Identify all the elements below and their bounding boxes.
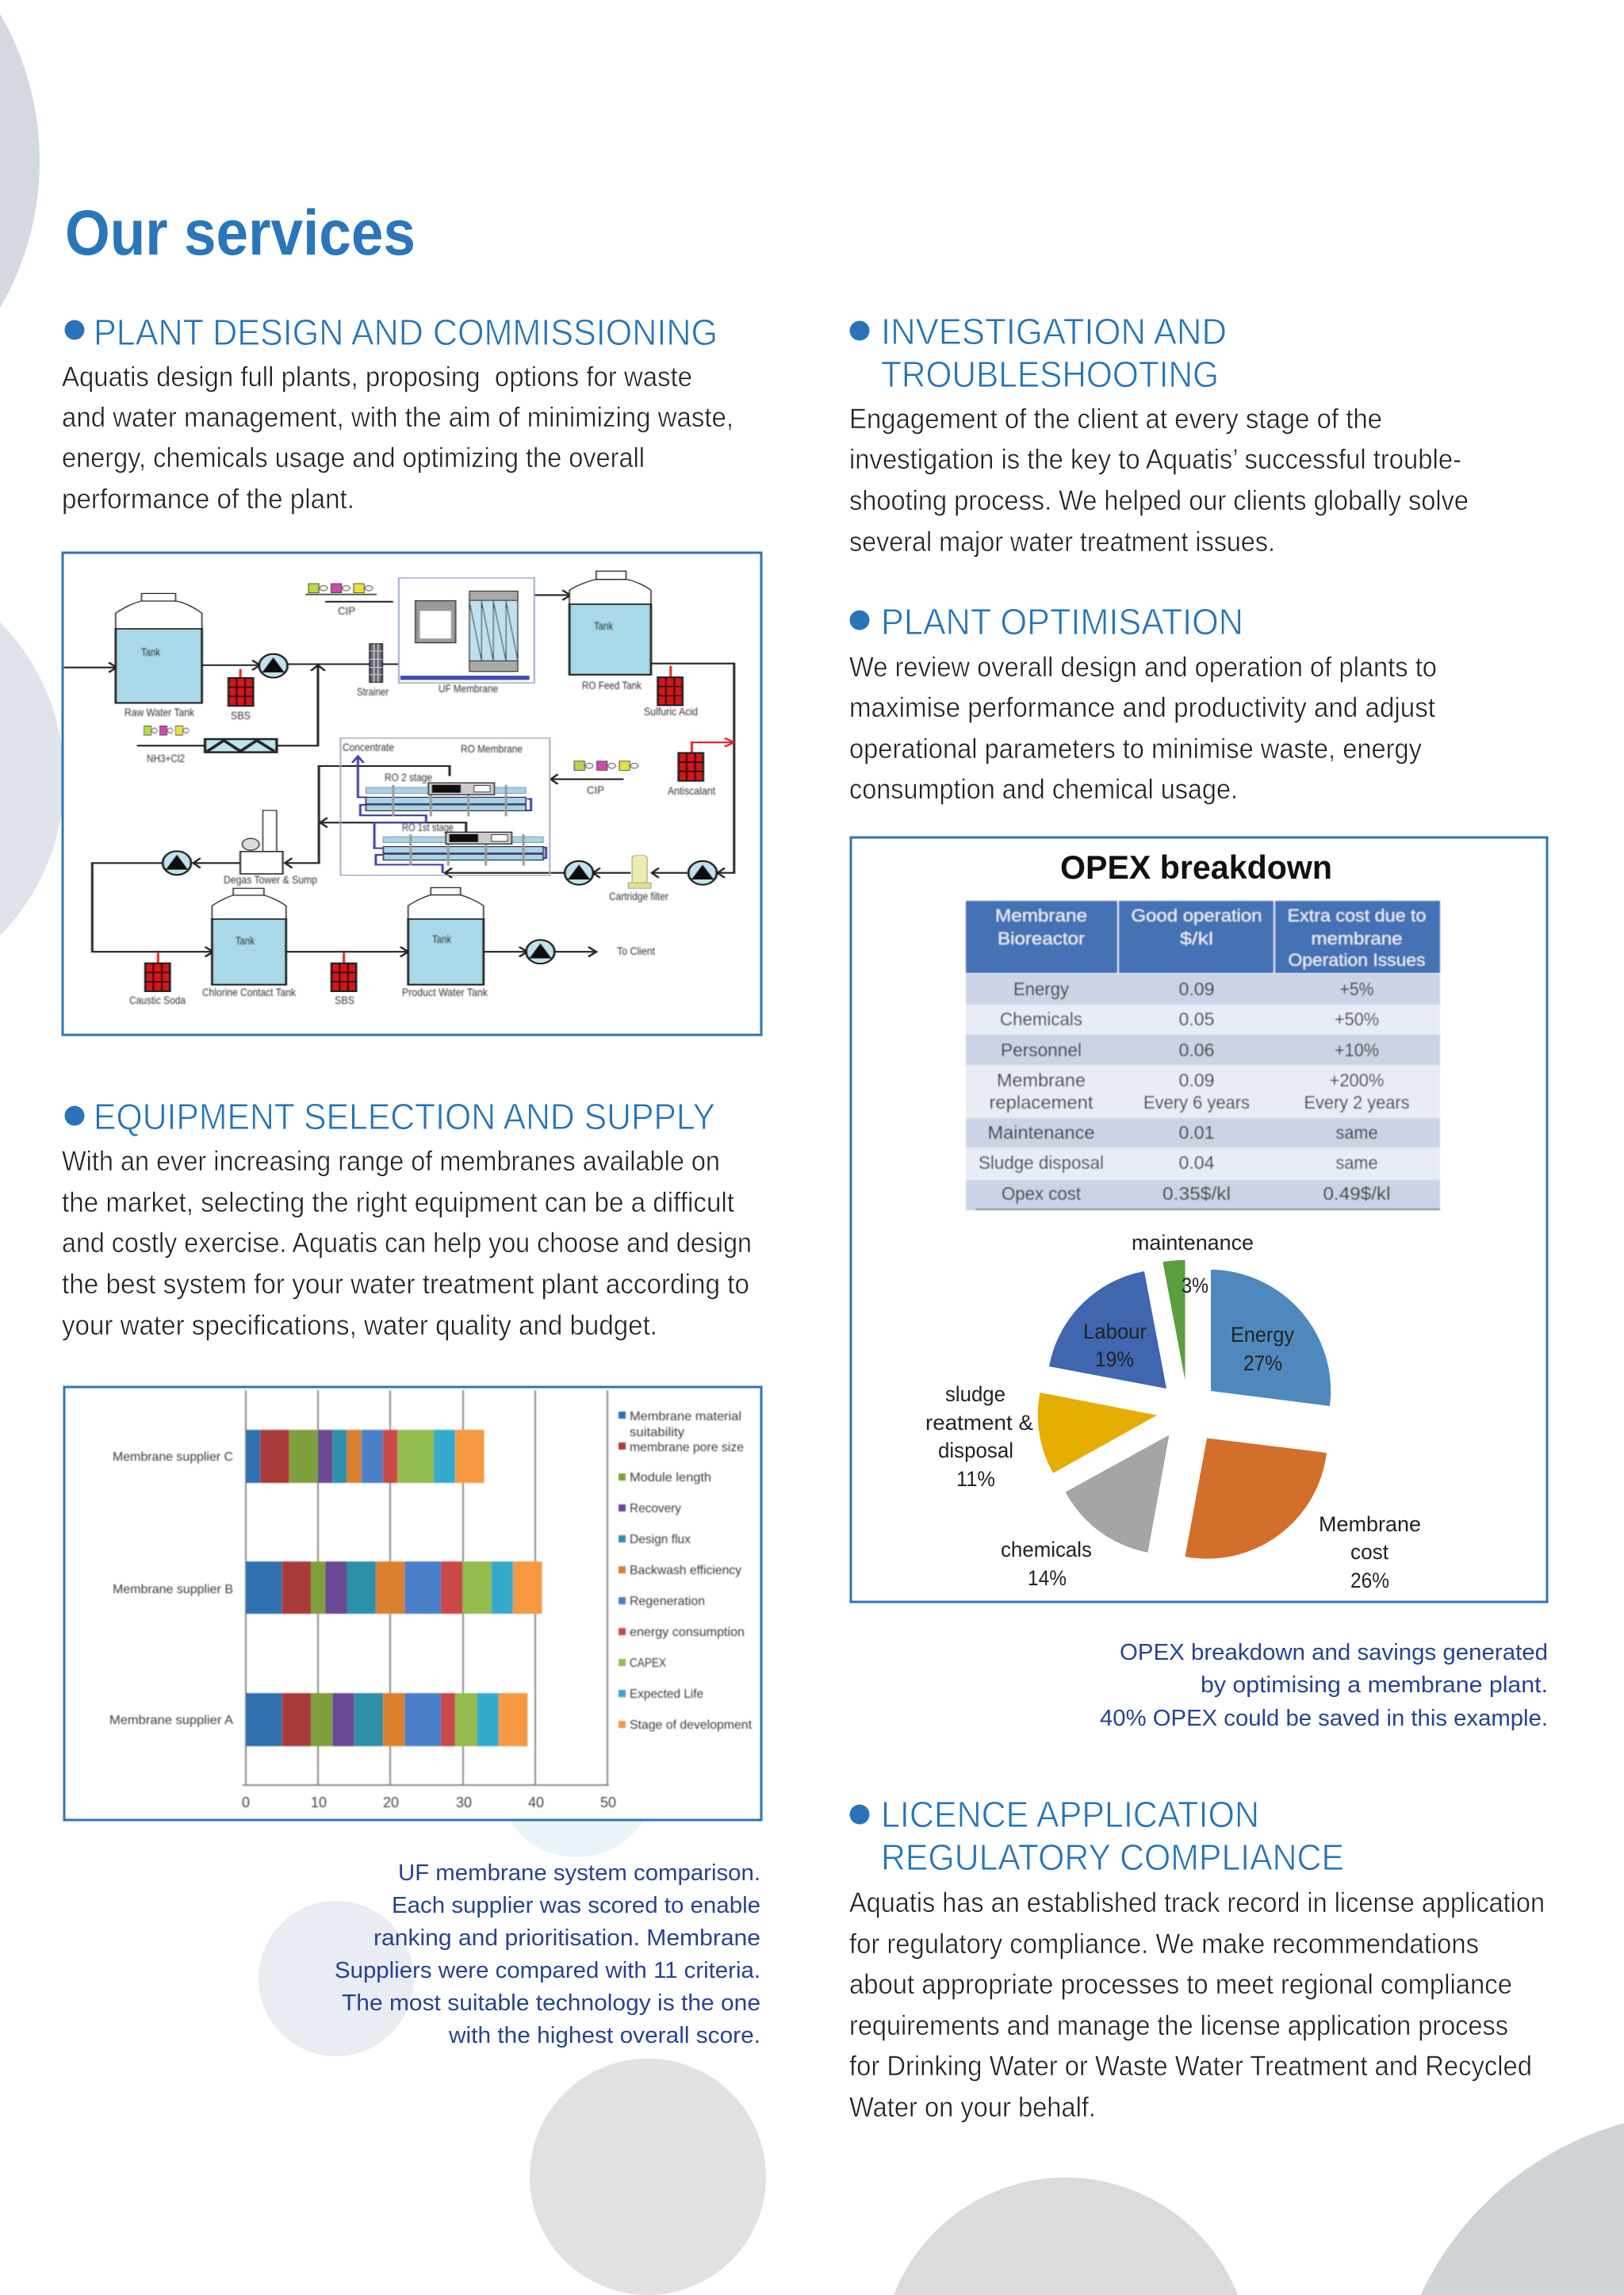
body text: performance of the plant. (62, 484, 354, 515)
title: Our services (65, 197, 416, 269)
pie labels: Membrane (1319, 1512, 1421, 1536)
pie chart (925, 1231, 1421, 1592)
row: opex cost (966, 1180, 1440, 1210)
caption: UF membrane comparison: The most suitable technology is the one (342, 1990, 760, 2016)
pumps (163, 654, 717, 964)
grid lines (243, 1390, 609, 1785)
row: maintenance (966, 1118, 1440, 1148)
section: plant optimisation (849, 601, 1437, 805)
decorative circle: light blue behind chart (497, 1699, 656, 1857)
slice: sludge 11% (1038, 1393, 1157, 1473)
diagram labels: CIP (338, 604, 355, 617)
decorative circle: pale behind caption (259, 1901, 414, 2056)
UF membrane unit (399, 578, 534, 683)
row: personnel (966, 1035, 1440, 1065)
pie labels: disposal (938, 1439, 1013, 1462)
diagram labels: Raw Water Tank (124, 706, 195, 718)
heading: PLANT OPTIMISATION (881, 601, 1243, 642)
pie labels: Labour (1083, 1320, 1147, 1343)
diagram labels: Strainer (357, 685, 389, 698)
body text: energy, chemicals usage and optimizing the overall (62, 443, 645, 473)
body text (62, 362, 733, 515)
pie labels: sludge (945, 1382, 1005, 1406)
row: chemicals: +50% (1335, 1009, 1379, 1029)
flow diagram drawing (64, 571, 734, 991)
category labels: Membrane supplier A (109, 1714, 233, 1727)
legend: suitability (630, 1426, 684, 1439)
CIP dosing: top (305, 584, 377, 595)
row: membrane replacement: Every 2 years (1304, 1092, 1410, 1113)
body text: and water management, with the aim of minimizing waste, (62, 402, 733, 433)
legend: Backwash efficiency (630, 1564, 741, 1577)
diagram labels: Tank (594, 619, 614, 632)
row: sludge disposal: 0.04 (1178, 1152, 1215, 1173)
body text: With an ever increasing range of membranes available on (62, 1146, 720, 1177)
CIP dosing: right (574, 761, 638, 770)
category labels: Membrane supplier C (113, 1450, 233, 1464)
decorative circle: top left (0, 14, 40, 308)
row: energy: Energy (1013, 979, 1069, 999)
pie labels: maintenance (1132, 1231, 1254, 1255)
body text: your water specifications, water quality and budget. (62, 1310, 657, 1341)
heading: INVESTIGATION AND (881, 311, 1227, 352)
diagram labels: SBS (231, 709, 251, 722)
body text: We review overall design and operation of plants to (849, 652, 1437, 683)
diagram labels: UF Membrane (439, 682, 498, 695)
pie labels: Energy (1231, 1323, 1294, 1347)
diagram labels: NH3+Cl2 (147, 752, 185, 764)
legend: energy consumption (630, 1626, 745, 1639)
heading: EQUIPMENT SELECTION AND SUPPLY (94, 1096, 715, 1137)
row: maintenance: same (1335, 1122, 1378, 1143)
body text: Water on your behalf. (849, 2092, 1096, 2123)
row: opex cost: 0.35$/kl (1162, 1183, 1231, 1204)
row: opex cost: Opex cost (1002, 1183, 1082, 1204)
pie labels: cost (1350, 1540, 1388, 1564)
stacked bar chart (109, 1390, 753, 1810)
diagram labels: RO 2 stage (385, 771, 432, 784)
pipework (64, 590, 734, 956)
legend: Stage of development (630, 1718, 753, 1732)
row: sludge disposal: Sludge disposal (979, 1152, 1104, 1173)
axis labels: 30 (456, 1795, 472, 1810)
table header: Membrane (995, 906, 1087, 925)
row: energy: +5% (1340, 979, 1373, 999)
category labels: Membrane supplier B (113, 1583, 233, 1596)
pie labels: 11% (956, 1467, 995, 1491)
caption: UF membrane comparison: Suppliers were compared with 11 criteria. (335, 1958, 760, 1983)
diagram labels: Antiscalant (668, 784, 715, 797)
tank: RO feed (569, 571, 651, 675)
tank: chlorine contact (213, 888, 286, 985)
slice: membrane cost 26% (1185, 1439, 1327, 1559)
caption: UF membrane comparison (335, 1860, 760, 2048)
diagram labels: RO 1st stage (402, 821, 454, 833)
diagram labels: Tank (236, 934, 255, 947)
diagram labels: Chlorine Contact Tank (202, 986, 297, 998)
table header: membrane (1312, 929, 1402, 948)
legend: CAPEX (630, 1657, 666, 1670)
body text: operational parameters to minimise waste, energy (849, 734, 1422, 764)
RO skid: stage 1 (383, 832, 543, 866)
table header: Bioreactor (998, 929, 1085, 948)
legend (619, 1410, 753, 1732)
tank: product water (408, 887, 484, 985)
body text: requirements and manage the license application process (849, 2010, 1508, 2041)
axis labels: 20 (383, 1795, 399, 1810)
diagram labels: RO Feed Tank (582, 679, 642, 692)
bar: supplier B (246, 1561, 542, 1614)
OPEX table (966, 901, 1440, 1210)
panel: process flow diagram (63, 553, 761, 1035)
slice: energy 27% (1211, 1270, 1331, 1406)
cartridge filter (628, 856, 651, 888)
pie labels: 19% (1095, 1347, 1134, 1371)
legend: Expected Life (630, 1688, 703, 1701)
blue concentrate lines (352, 757, 546, 873)
static mixer (205, 739, 277, 753)
pie labels: 3% (1182, 1274, 1208, 1297)
row: chemicals: Chemicals (1000, 1009, 1082, 1029)
axis labels: 10 (311, 1795, 327, 1810)
pie labels: 27% (1243, 1351, 1282, 1375)
row: membrane replacement: Every 6 years (1143, 1092, 1250, 1113)
slice: labour 19% (1049, 1271, 1166, 1389)
tank: raw water (116, 593, 202, 703)
row: membrane replacement: Membrane (997, 1070, 1086, 1090)
row: membrane replacement: replacement (990, 1092, 1094, 1113)
decorative circle: grey bottom (894, 2178, 1238, 2295)
bullet (850, 320, 869, 341)
table header: Operation Issues (1288, 950, 1426, 970)
legend: membrane pore size (630, 1441, 744, 1454)
row: sludge disposal: same (1335, 1152, 1378, 1173)
row: chemicals: 0.05 (1178, 1009, 1215, 1029)
caption: OPEX savings: OPEX breakdown and savings generated (1120, 1640, 1548, 1665)
axis labels: 40 (528, 1795, 544, 1810)
body text: for regulatory compliance. We make recommendations (849, 1929, 1479, 1960)
legend: Module length (630, 1471, 711, 1485)
caption: OPEX savings (1100, 1640, 1548, 1731)
heading (881, 311, 1227, 395)
row: personnel: +10% (1335, 1040, 1379, 1060)
body text: several major water treatment issues. (849, 527, 1275, 557)
RO skid: stage 2 (366, 783, 526, 816)
diagram labels: CIP (587, 784, 604, 796)
row: maintenance: 0.01 (1178, 1122, 1215, 1143)
legend: Regeneration (630, 1595, 705, 1608)
legend: Membrane material (630, 1410, 741, 1423)
bullet (65, 320, 84, 339)
decorative circle: middle left (0, 622, 64, 936)
panel: OPEX breakdown (851, 837, 1547, 1602)
axis labels: 50 (600, 1795, 616, 1810)
degas tower (240, 810, 283, 874)
axis labels: 0 (242, 1795, 250, 1810)
bar: supplier A (246, 1693, 527, 1746)
row: energy (966, 974, 1440, 1005)
diagram labels: Product Water Tank (402, 986, 488, 998)
row: maintenance: Maintenance (988, 1122, 1094, 1143)
body text (62, 1146, 752, 1341)
body text: maximise performance and productivity and adjust (849, 692, 1435, 723)
diagram labels: Caustic Soda (129, 994, 186, 1006)
body text (849, 1887, 1545, 2123)
category labels (109, 1450, 233, 1727)
body text: and costly exercise. Aquatis can help you choose and design (62, 1228, 752, 1259)
row: personnel: 0.06 (1178, 1040, 1215, 1060)
red dosing lines (158, 666, 734, 964)
legend: Design flux (630, 1533, 691, 1546)
panel frame (851, 837, 1547, 1602)
bullet (65, 1105, 84, 1126)
strainer (370, 644, 382, 682)
panel frame (64, 1387, 761, 1820)
heading (881, 1794, 1344, 1878)
pie labels: reatment & (925, 1411, 1033, 1435)
table header: $/kl (1180, 929, 1213, 948)
row: membrane replacement: +200% (1329, 1070, 1385, 1090)
pie labels: chemicals (1001, 1538, 1092, 1561)
caption: UF membrane comparison: UF membrane system comparison. (398, 1860, 760, 1886)
body text: the best system for your water treatment plant according to (62, 1269, 749, 1300)
row: chemicals (966, 1005, 1440, 1035)
body text: Aquatis design full plants, proposing options for waste (62, 362, 692, 393)
row: sludge disposal (966, 1148, 1440, 1180)
body text (849, 652, 1437, 805)
chemical dosing tanks (145, 677, 703, 991)
body text: consumption and chemical usage. (849, 774, 1238, 805)
body text: Engagement of the client at every stage of the (849, 404, 1382, 435)
diagram labels: SBS (335, 994, 354, 1006)
table header: Good operation (1131, 906, 1262, 925)
legend: Recovery (630, 1502, 681, 1515)
diagram labels: Concentrate (343, 741, 394, 753)
diagram labels: Cartridge filter (609, 890, 668, 902)
body text (849, 404, 1469, 557)
section: licence application (849, 1794, 1545, 2123)
panel title: OPEX breakdown (1060, 849, 1332, 886)
CIP dosing: left (144, 726, 189, 735)
caption: UF membrane comparison: with the highest overall score. (448, 2023, 760, 2048)
slice: maintenance 3% (1162, 1260, 1185, 1380)
pie labels (925, 1231, 1421, 1592)
heading: PLANT DESIGN AND COMMISSIONING (94, 312, 718, 353)
caption: OPEX savings: 40% OPEX could be saved in this example. (1100, 1706, 1548, 1731)
body text: shooting process. We helped our clients globally solve (849, 485, 1469, 516)
section: equipment selection and supply (62, 1096, 752, 1341)
diagram labels: RO Membrane (461, 742, 523, 755)
table header: Extra cost due to (1288, 906, 1426, 925)
pie labels: 26% (1350, 1569, 1389, 1592)
caption: UF membrane comparison: ranking and prioritisation. Membrane (373, 1925, 760, 1951)
heading: LICENCE APPLICATION (881, 1794, 1259, 1835)
bullet (850, 1805, 869, 1824)
diagram labels: Degas Tower & Sump (224, 873, 317, 886)
row: membrane replacement: 0.09 (1178, 1070, 1215, 1090)
diagram labels: Tank (141, 646, 161, 658)
row: personnel: Personnel (1001, 1040, 1082, 1060)
diagram labels: To Client (617, 944, 655, 957)
panel: supplier comparison chart (64, 1387, 761, 1820)
panel frame (63, 553, 761, 1035)
diagram labels (124, 604, 715, 1006)
bar: supplier C (246, 1430, 485, 1483)
row: membrane replacement (966, 1065, 1440, 1118)
heading: REGULATORY COMPLIANCE (881, 1837, 1344, 1878)
pie labels: 14% (1028, 1566, 1067, 1590)
body text: Aquatis has an established track record in license application (849, 1887, 1545, 1918)
body text: for Drinking Water or Waste Water Treatment and Recycled (849, 2051, 1532, 2082)
bullet (850, 611, 869, 630)
body text: about appropriate processes to meet regional compliance (849, 1969, 1512, 2000)
decorative circle: grey bottom middle (530, 2059, 766, 2295)
axis labels (242, 1795, 616, 1810)
caption: OPEX savings: by optimising a membrane plant. (1201, 1672, 1548, 1698)
body text: the market, selecting the right equipment can be a difficult (62, 1187, 734, 1218)
diagram labels: Tank (432, 933, 452, 945)
RO membrane box (340, 738, 550, 875)
heading: TROUBLESHOOTING (881, 354, 1219, 395)
table header (966, 901, 1440, 973)
caption: UF membrane comparison: Each supplier was scored to enable (392, 1893, 760, 1918)
section: plant design and commissioning (62, 312, 733, 515)
section: investigation and troubleshooting (849, 311, 1469, 557)
diagram labels: Sulfuric Acid (644, 705, 698, 718)
row: opex cost: 0.49$/kl (1323, 1183, 1391, 1204)
slice: chemicals 14% (1066, 1435, 1169, 1553)
row: energy: 0.09 (1178, 979, 1215, 999)
decorative circle: grey bottom right (1421, 2123, 1624, 2295)
body text: investigation is the key to Aquatis’ successful trouble- (849, 444, 1461, 475)
